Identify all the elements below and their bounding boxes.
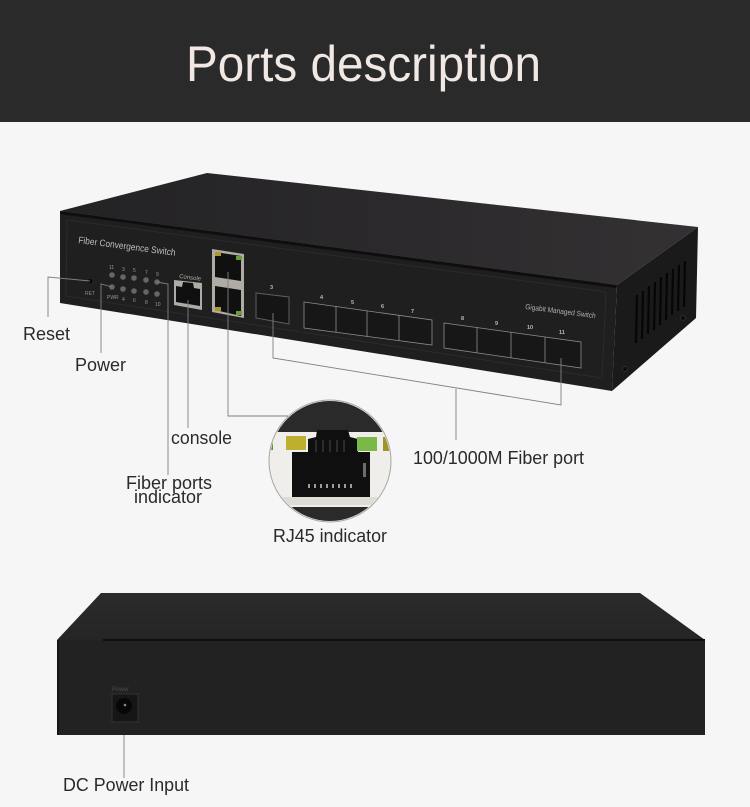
- rear top surface: [57, 593, 705, 640]
- LED indicators: 5: [133, 268, 136, 274]
- SFP ports 8 to 11: 9: [495, 321, 498, 327]
- LED indicators: PWR: [107, 295, 119, 301]
- title: Ports description: [186, 36, 541, 92]
- SFP ports 8 to 11: 11: [559, 330, 565, 336]
- switch side with vents: [612, 227, 698, 391]
- RJ45 magnified inset: [268, 400, 392, 531]
- console port: [174, 274, 202, 310]
- SFP ports 4 to 7: [304, 295, 432, 345]
- label: fiber port: 100/1000M Fiber port: [413, 448, 584, 468]
- label: Reset: Reset: [23, 324, 70, 344]
- SFP ports 4 to 7: 5: [351, 300, 354, 306]
- LED indicators: 10: [155, 302, 161, 308]
- front view switch: [60, 173, 698, 391]
- SFP ports 4 to 7: 6: [381, 304, 384, 310]
- model text: Gigabit Managed Switch: [525, 302, 596, 320]
- label: console: console: [171, 428, 232, 448]
- label: Fiber ports indicator: Fiber ports: [126, 473, 212, 493]
- title banner: [0, 0, 750, 122]
- label: Fiber ports indicator: [126, 473, 212, 507]
- brand text: Fiber Convergence Switch: [78, 235, 176, 259]
- LED indicators: 4: [122, 297, 125, 303]
- label: DC Power Input: DC Power Input: [63, 775, 189, 795]
- SFP ports 8 to 11: [444, 316, 581, 368]
- switch front panel: [60, 211, 617, 391]
- rear view switch: [57, 593, 705, 735]
- SFP port 3: 3: [270, 285, 273, 291]
- LED indicators: 11: [109, 265, 114, 271]
- reset hole: [85, 279, 95, 297]
- console port: Console: [179, 274, 202, 283]
- SFP ports 4 to 7: 4: [320, 295, 324, 301]
- LED indicators: 8: [145, 300, 148, 306]
- label: Fiber ports indicator: indicator: [134, 487, 202, 507]
- dual RJ45 port: [212, 249, 244, 318]
- switch top surface: [60, 173, 698, 285]
- LED indicators: [107, 265, 161, 308]
- SFP ports 8 to 11: 8: [461, 316, 464, 322]
- SFP ports 4 to 7: 7: [411, 309, 414, 315]
- label: RJ45 indicator: RJ45 indicator: [273, 526, 387, 546]
- rear panel: [57, 640, 705, 735]
- power port: Power: [112, 687, 129, 693]
- leader lines: [48, 272, 561, 778]
- SFP ports 8 to 11: 10: [527, 325, 533, 331]
- label: Power: Power: [75, 355, 126, 375]
- LED indicators: 7: [145, 270, 148, 276]
- LED indicators: 3: [122, 267, 125, 273]
- LED indicators: 9: [156, 272, 159, 278]
- reset hole: RET: [85, 291, 95, 297]
- power port: [112, 687, 138, 722]
- LED indicators: 6: [133, 298, 136, 304]
- SFP port 3: [256, 285, 289, 324]
